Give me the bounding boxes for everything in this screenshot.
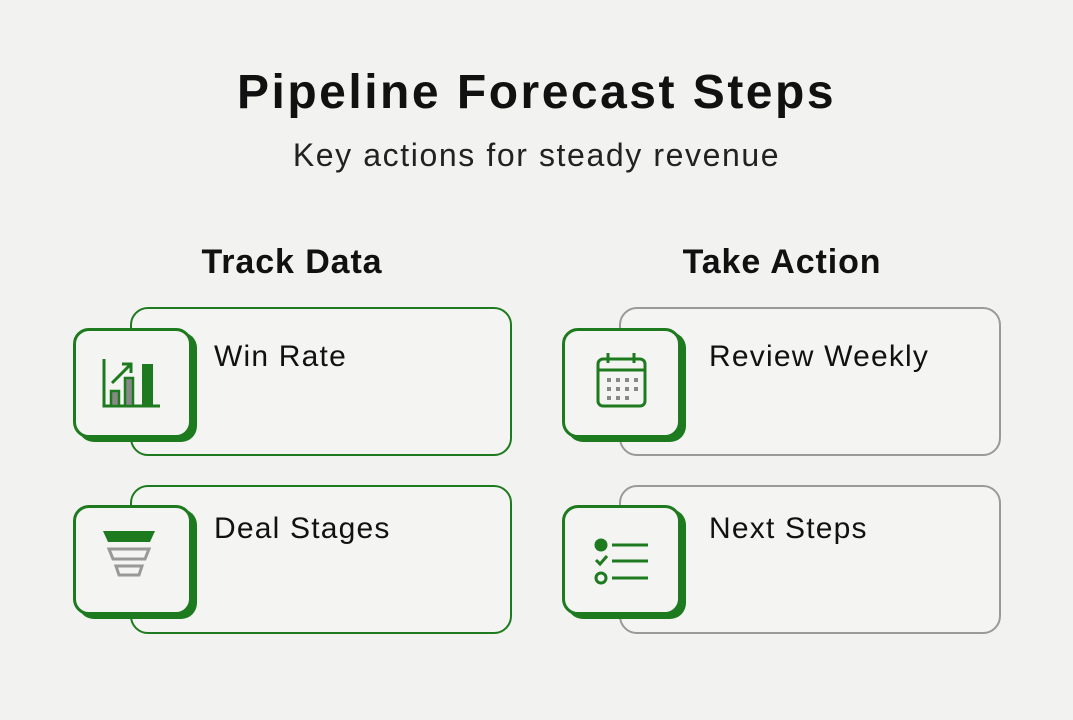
card: Review Weekly bbox=[562, 307, 1001, 456]
icon: funnel bbox=[73, 505, 192, 615]
card: Win Rate bbox=[73, 307, 512, 456]
subtitle: Key actions for steady revenue bbox=[293, 137, 780, 173]
label: Next Steps bbox=[709, 512, 868, 545]
icon: checklist bbox=[562, 505, 681, 615]
card: Next Steps bbox=[562, 485, 1001, 634]
label: Review Weekly bbox=[709, 340, 929, 373]
card: Deal Stages bbox=[73, 485, 512, 634]
title: Pipeline Forecast Steps bbox=[237, 66, 836, 119]
heading: Track Data: Track Data bbox=[202, 243, 382, 281]
heading: Take Action: Take Action bbox=[683, 243, 881, 281]
label: Win Rate bbox=[214, 340, 347, 373]
label: Deal Stages bbox=[214, 512, 391, 545]
icon: calendar bbox=[562, 328, 681, 438]
icon: bar chart bbox=[73, 328, 192, 438]
